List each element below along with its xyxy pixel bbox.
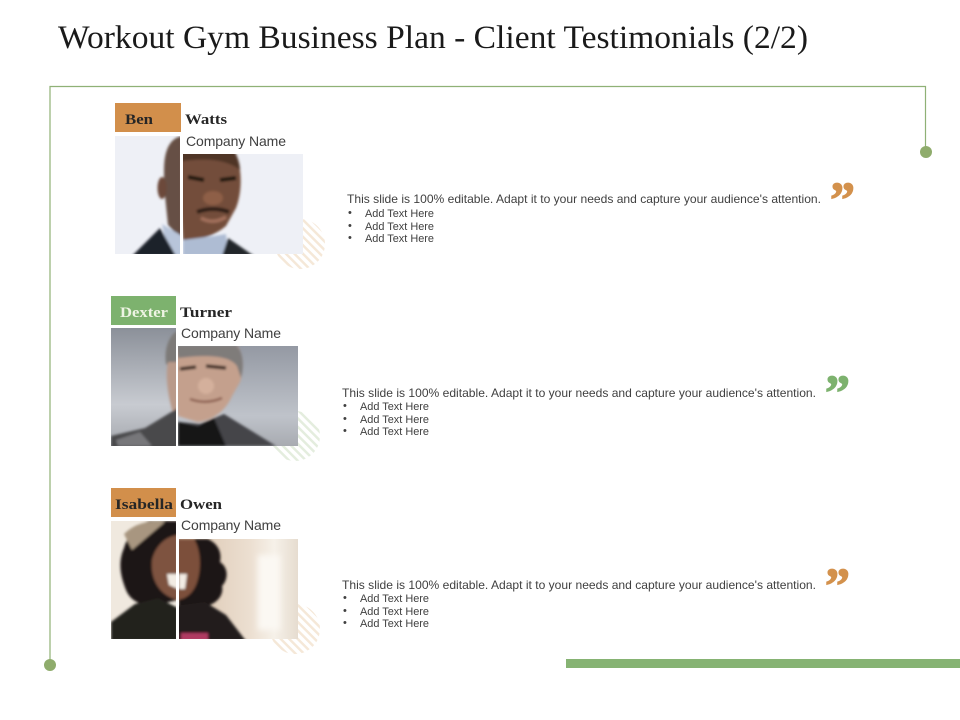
title: Workout Gym Business Plan - Client Testimonials (2/2) <box>58 20 808 56</box>
company name: Company Name <box>181 517 281 533</box>
testimonial text: Add Text Here <box>360 593 429 605</box>
first name tag <box>115 103 181 132</box>
testimonial text: • <box>343 592 347 604</box>
portrait right half <box>172 345 298 446</box>
portrait left half <box>111 328 178 448</box>
testimonial text: • <box>343 425 347 437</box>
testimonial text: Add Text Here <box>365 233 434 245</box>
testimonial text: This slide is 100% editable. Adapt it to your needs and capture your audience's attention. <box>342 578 816 592</box>
accent bar <box>566 659 960 668</box>
testimonial text: Add Text Here <box>360 618 429 630</box>
portrait left half <box>111 521 178 641</box>
hatch circle <box>270 411 320 461</box>
testimonial text: • <box>343 413 347 425</box>
hatch circle <box>275 219 325 269</box>
company name: Company Name <box>181 325 281 341</box>
frame with end dots <box>44 86 932 671</box>
testimonial text: • <box>348 220 352 232</box>
first name tag <box>111 488 176 517</box>
testimonial text: • <box>348 232 352 244</box>
testimonial text: • <box>348 207 352 219</box>
testimonial text: Add Text Here <box>360 426 429 438</box>
testimonial text: • <box>343 400 347 412</box>
panel: Dexter Turner testimonial <box>111 296 850 461</box>
icon: quote mark: ” <box>830 171 855 227</box>
last name: Owen <box>180 497 222 513</box>
first name tag: Dexter <box>120 305 169 321</box>
testimonial text: • <box>343 617 347 629</box>
icon: quote mark: ” <box>825 557 850 613</box>
company name: Company Name <box>186 133 286 149</box>
panel: Ben Watts testimonial <box>115 103 855 269</box>
testimonial text: Add Text Here <box>365 208 434 220</box>
last name: Turner <box>180 305 233 321</box>
testimonial text: Add Text Here <box>360 414 429 426</box>
testimonial text <box>347 192 821 245</box>
portrait left half <box>115 136 182 256</box>
testimonial text <box>342 386 816 438</box>
testimonial text: Add Text Here <box>365 221 434 233</box>
icon: quote mark: ” <box>825 364 850 420</box>
testimonial text: This slide is 100% editable. Adapt it to your needs and capture your audience's attention. <box>342 386 816 400</box>
panel: Isabella Owen testimonial <box>111 488 850 654</box>
last name: Watts <box>185 112 227 128</box>
testimonial text <box>342 578 816 630</box>
hatch circle <box>270 604 320 654</box>
portrait right half <box>175 539 298 641</box>
first name tag <box>111 296 176 325</box>
testimonial text: Add Text Here <box>360 606 429 618</box>
first name tag: Isabella <box>115 497 174 513</box>
testimonial text: • <box>343 605 347 617</box>
testimonial text: Add Text Here <box>360 401 429 413</box>
testimonial text: This slide is 100% editable. Adapt it to your needs and capture your audience's attention. <box>347 192 821 206</box>
portrait right half <box>183 154 303 254</box>
first name tag: Ben <box>125 112 153 128</box>
